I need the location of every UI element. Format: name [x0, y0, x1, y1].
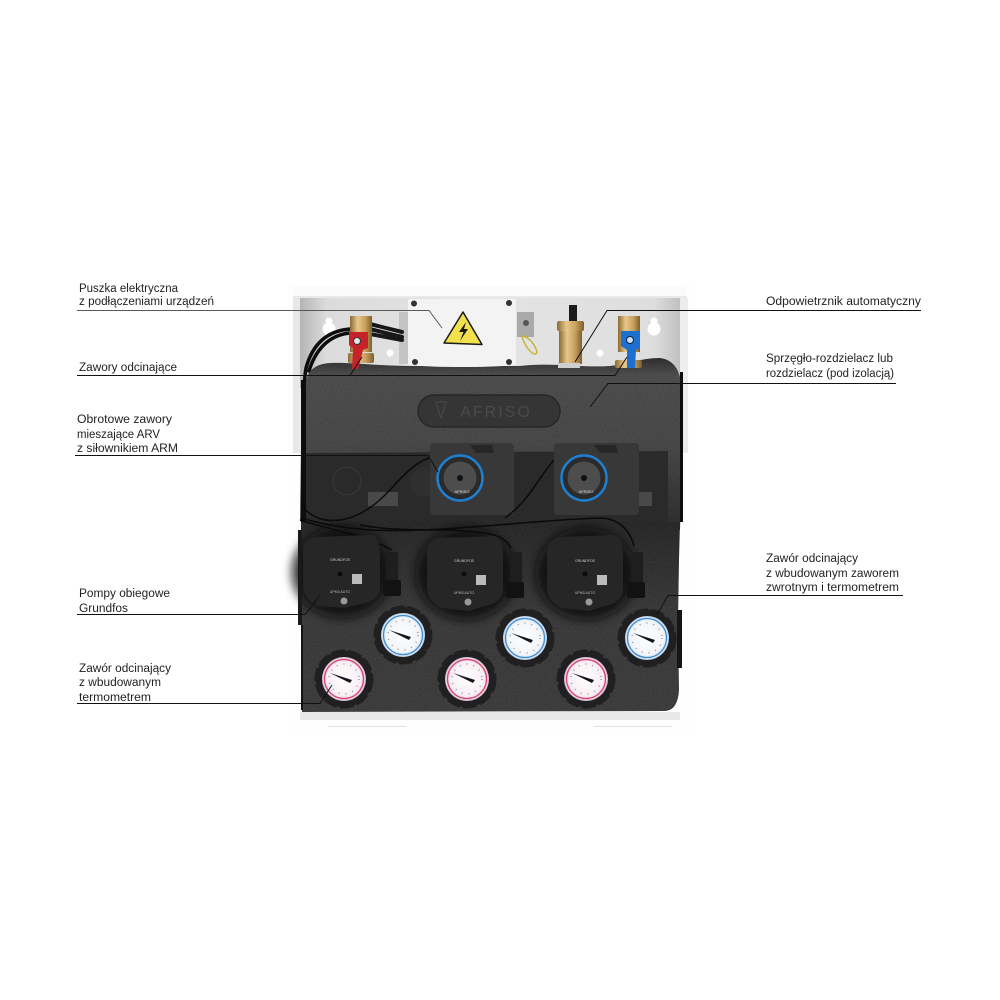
keyhole mounts and holes — [322, 318, 660, 356]
callout: valve with check valve and thermometer — [657, 553, 903, 615]
electrical junction box — [408, 299, 516, 367]
thermometer: blue 3 — [619, 610, 675, 666]
callout: mixing valves — [75, 414, 438, 472]
callout: automatic air vent: Odpowietrznik automatyczny — [766, 296, 921, 308]
callout: mixing valves: mieszające ARV — [77, 429, 160, 441]
mixing valve actuator 2 — [554, 443, 639, 515]
thermometer: blue 1 — [375, 607, 431, 663]
callout: circulation pumps: Pompy obiegowe — [79, 588, 170, 600]
pump 2: UPM3 AUTO — [454, 591, 474, 595]
callout: mixing valves: Obrotowe zawory — [77, 414, 172, 426]
thermometer: blue 2 — [497, 610, 553, 666]
callout: valve with thermometer — [77, 663, 332, 704]
insulation logo plate — [418, 395, 560, 427]
insulation: upper manifold — [301, 358, 683, 530]
thermometer: red 2 — [439, 651, 495, 707]
cabinet frame — [287, 285, 693, 736]
bracket and yellow wire — [399, 312, 537, 364]
insulation: lower section — [292, 522, 682, 712]
pump 2 — [427, 536, 524, 611]
callout: mixing valves: z siłownikiem ARM — [77, 443, 178, 455]
mixing valve actuator 2: AFRISO — [579, 489, 593, 494]
blue shut-off valve — [615, 316, 642, 368]
thermometer: red 3 — [558, 651, 614, 707]
callout: junction box — [77, 283, 442, 328]
pump 2: GRUNDFOS — [454, 559, 475, 563]
actuator cables — [300, 458, 634, 550]
red shut-off valve — [348, 316, 374, 369]
pump 3: GRUNDFOS — [575, 559, 596, 563]
pump 1: UPM3 AUTO — [330, 590, 350, 594]
mixing valve actuator 1 — [430, 443, 514, 515]
callout: circulation pumps — [77, 588, 320, 615]
callout: valve with thermometer: z wbudowanym — [79, 677, 161, 689]
callout: junction box: z podłączeniami urządzeń — [79, 296, 214, 308]
icon: high voltage warning — [444, 312, 482, 344]
mixing valve actuator 1: AFRISO — [455, 489, 469, 494]
insulation logo plate: AFRISO — [460, 404, 532, 421]
automatic air vent — [557, 305, 584, 368]
cable bundle from electrical box — [302, 324, 402, 520]
callout: shut-off valves: Zawory odcinające — [79, 362, 177, 374]
callout: valve with check valve and thermometer: zwrotnym i termometrem — [766, 582, 899, 594]
callout: automatic air vent — [575, 296, 921, 362]
pump 1 — [303, 535, 401, 608]
callout: manifold — [590, 353, 896, 407]
callout: shut-off valves — [77, 357, 627, 376]
pump 1: GRUNDFOS — [330, 558, 351, 562]
callout: manifold: rozdzielacz (pod izolacją) — [766, 368, 894, 380]
callout: valve with check valve and thermometer: Zawór odcinający — [766, 553, 858, 565]
callout: valve with thermometer: Zawór odcinający — [79, 663, 171, 675]
callout: manifold: Sprzęgło-rozdzielacz lub — [766, 353, 893, 365]
thermometer: red 1 — [316, 651, 372, 707]
callout: circulation pumps: Grundfos — [79, 603, 128, 615]
callout: valve with check valve and thermometer: z wbudowanym zaworem — [766, 568, 899, 580]
pump 3: UPM3 AUTO — [575, 591, 595, 595]
pump 3 — [547, 535, 645, 611]
callout: junction box: Puszka elektryczna — [79, 283, 179, 295]
callout: valve with thermometer: termometrem — [79, 692, 151, 704]
insulation: recessed panel — [306, 451, 668, 530]
